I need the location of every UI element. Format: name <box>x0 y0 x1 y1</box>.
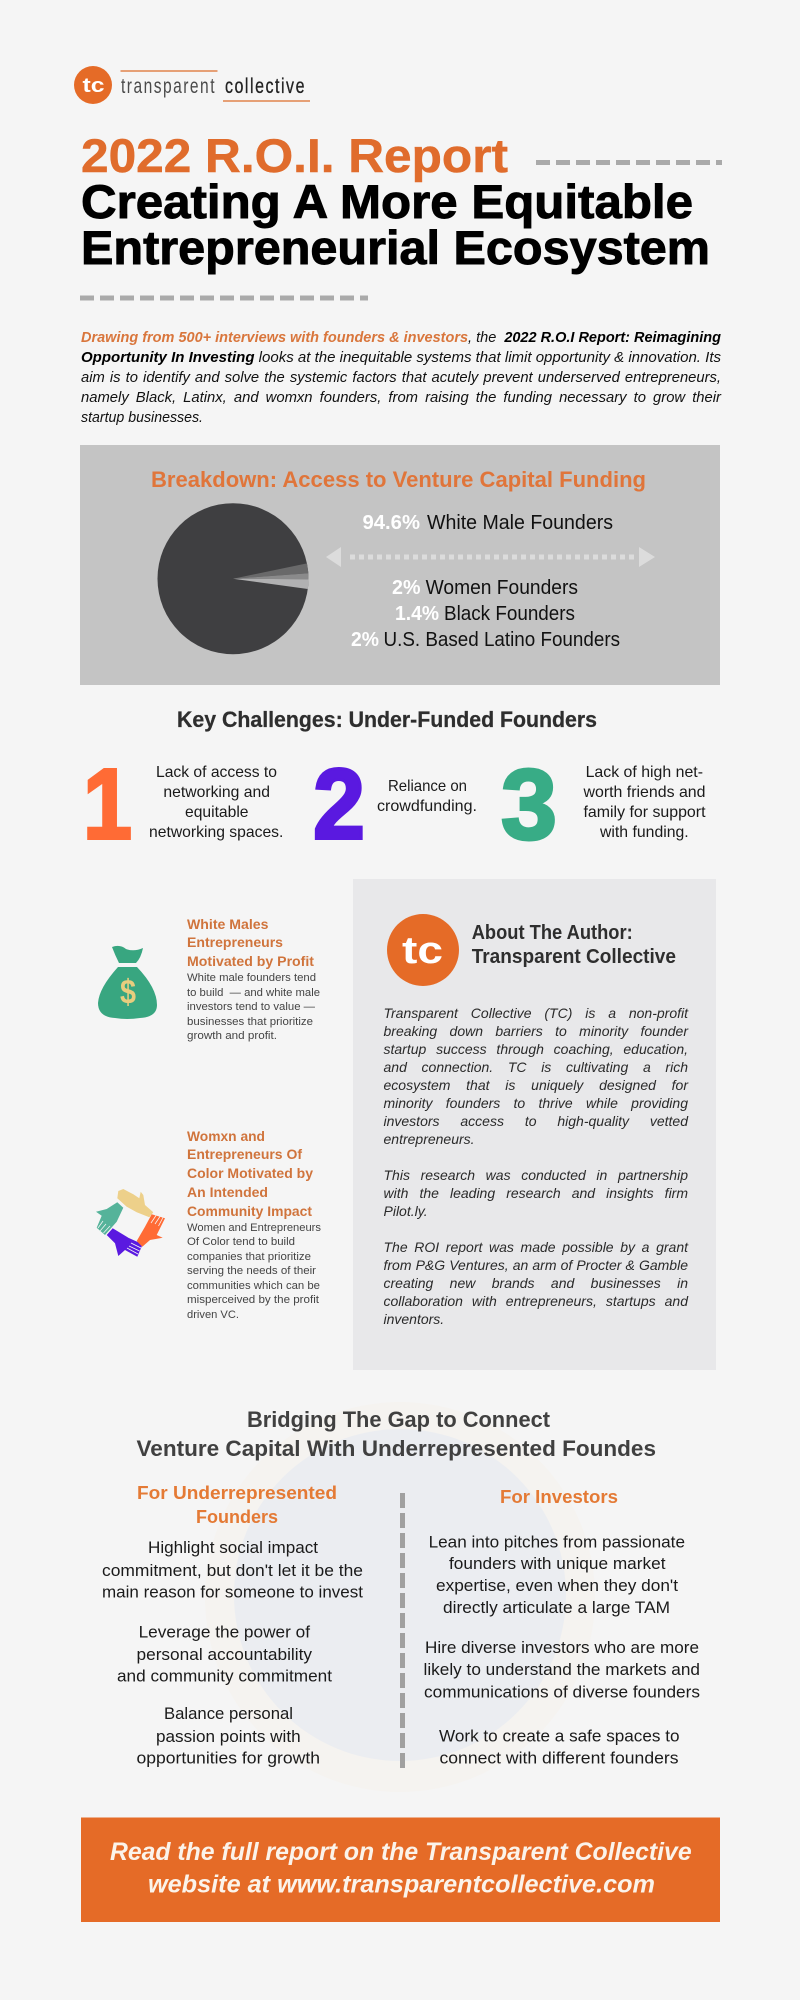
background circle behind bridging section <box>205 1402 595 1792</box>
challenge 3: 3 <box>501 749 557 861</box>
challenge 2: 2 <box>313 748 365 860</box>
text: about the author body: creating new brands and businesses in <box>384 1275 688 1291</box>
list: advice for founders: Leverage the power of <box>139 1622 310 1642</box>
heading: about the author: About The Author: <box>472 922 633 944</box>
text: about the author body: This research was conducted in partnership <box>384 1167 688 1183</box>
logo: transparent collective: collective <box>225 75 306 98</box>
logo: transparent collective <box>74 66 310 104</box>
icon: tc logo circle <box>387 914 459 986</box>
dashed divider between columns <box>400 1493 405 1768</box>
arrow: double-headed dotted <box>326 547 655 567</box>
text: womxn and entrepreneurs of color motivated by impact: Of Color tend to build <box>187 1236 295 1248</box>
list: advice for founders: opportunities for growth <box>136 1748 320 1768</box>
text: about the author body: and connection. TC is cultivating a rich <box>384 1059 688 1075</box>
list: advice for investors: connect with different founders <box>440 1748 678 1768</box>
label: latino founders: 2% <box>351 629 379 651</box>
banner: read the full report: Read the full report on the Transparent Collective <box>110 1838 692 1866</box>
title: Creating A More Equitable <box>81 175 693 228</box>
list: advice for founders: personal accountability <box>136 1645 312 1664</box>
heading: bridging the gap: Bridging The Gap to Connect <box>247 1407 551 1432</box>
banner: read the full report <box>81 1818 720 1922</box>
logo: transparent collective: transparent <box>121 75 216 98</box>
challenge 1: equitable <box>185 804 249 821</box>
intro paragraph: Drawing from 500+ interviews with founders & investors, the 2022 R.O.I Report: Reimagining <box>81 329 721 346</box>
heading: for underrepresented founders: Founders <box>196 1506 278 1527</box>
text: white male entrepreneurs motivated by profit: Motivated by Profit <box>187 954 315 969</box>
challenge 3: with funding. <box>599 824 689 841</box>
label: black founders: Black Founders <box>444 603 575 625</box>
text: womxn and entrepreneurs of color motivated by impact: Women and Entrepreneurs <box>187 1222 322 1234</box>
heading: for investors: For Investors <box>500 1486 618 1507</box>
pie chart <box>158 503 309 654</box>
intro paragraph: namely Black, Latinx, and womxn founders, from raising the funding necessary to grow their <box>81 389 722 406</box>
intro paragraph <box>81 329 722 426</box>
intro paragraph: startup businesses. <box>81 409 203 426</box>
text: about the author body: Transparent Collective (TC) is a non-profit <box>384 1005 688 1021</box>
label: black founders <box>395 603 575 625</box>
panel: about the author background and header <box>353 879 716 1370</box>
challenge 3: worth friends and <box>583 784 706 801</box>
text: womxn and entrepreneurs of color motivated by impact: communities which can be <box>187 1280 320 1292</box>
list: advice for founders: passion points with <box>156 1727 301 1746</box>
text: about the author body: minority founders to thrive while providing <box>384 1095 688 1111</box>
list: advice for investors: expertise, even when they don't <box>436 1576 678 1595</box>
heading: bridging the gap: Venture Capital With Underrepresented Foundes <box>136 1436 656 1461</box>
icon: money bag <box>98 946 157 1019</box>
challenge 1: networking and <box>163 784 270 801</box>
text: womxn and entrepreneurs of color motivated by impact: serving the needs of their <box>187 1265 316 1277</box>
challenge 3: Lack of high net- <box>586 764 703 781</box>
title: Entrepreneurial Ecosystem <box>81 221 710 274</box>
icon: four hands <box>96 1189 165 1257</box>
list: advice for founders: Highlight social impact <box>148 1538 318 1557</box>
icon: tc logo circle: tc <box>402 930 443 972</box>
list: advice for investors: likely to understand the markets and <box>424 1660 700 1679</box>
text: womxn and entrepreneurs of color motivated by impact: Womxn and <box>187 1129 265 1144</box>
challenge 2: crowdfunding. <box>377 798 477 815</box>
text: white male entrepreneurs motivated by profit: White Males <box>187 917 268 932</box>
text: about the author body: The ROI report was made possible by a grant <box>384 1239 688 1255</box>
icon: money bag: $ <box>120 974 136 1012</box>
text: womxn and entrepreneurs of color motivated by impact <box>187 1129 322 1321</box>
text: white male entrepreneurs motivated by profit: to build — and white male <box>187 987 320 999</box>
text: about the author body <box>384 1005 688 1327</box>
text: white male entrepreneurs motivated by profit: Entrepreneurs <box>187 935 283 950</box>
text: about the author body: with the leading research and insights firm <box>384 1185 688 1201</box>
challenge 1: networking spaces. <box>149 824 283 841</box>
dashed rule: below title <box>80 296 368 300</box>
text: about the author body: investors access to high-quality vetted <box>384 1113 688 1129</box>
list: advice for founders: Balance personal <box>164 1704 293 1723</box>
panel: breakdown of venture capital funding <box>80 445 720 685</box>
heading: breakdown: Breakdown: Access to Venture Capital Funding <box>151 467 646 492</box>
heading: bridging the gap <box>136 1407 656 1461</box>
intro paragraph: aim is to identify and solve the systemic factors that acutely prevent underserved entrepreneurs, <box>81 369 721 386</box>
heading: about the author <box>472 922 676 968</box>
list: advice for founders: and community commitment <box>117 1666 332 1686</box>
list: advice for investors: communications of diverse founders <box>424 1682 700 1702</box>
text: about the author body: breaking down barriers to minority founder <box>384 1023 688 1039</box>
list: advice for founders: main reason for someone to invest <box>102 1582 363 1602</box>
text: womxn and entrepreneurs of color motivated by impact: Entrepreneurs Of <box>187 1147 303 1162</box>
list: advice for investors: founders with unique market <box>449 1554 666 1573</box>
text: white male entrepreneurs motivated by profit: investors tend to value — <box>187 1001 315 1013</box>
list: advice for investors: directly articulate a large TAM <box>443 1598 670 1617</box>
text: womxn and entrepreneurs of color motivated by impact: driven VC. <box>187 1309 239 1321</box>
text: womxn and entrepreneurs of color motivated by impact: Color Motivated by <box>187 1166 314 1181</box>
title: 2022 R.O.I. Report <box>81 129 508 182</box>
label: white male founders: 94.6% <box>362 512 420 534</box>
challenge 2 <box>313 748 477 860</box>
text: white male entrepreneurs motivated by profit: White male founders tend <box>187 972 316 984</box>
logo: transparent collective: tc <box>82 75 104 97</box>
banner: read the full report: website at www.transparentcollective.com <box>148 1870 655 1898</box>
label: latino founders: U.S. Based Latino Founders <box>384 629 620 651</box>
heading: for underrepresented founders <box>137 1482 337 1527</box>
list: advice for investors: Work to create a safe spaces to <box>439 1726 680 1746</box>
list: advice for founders: commitment, but don't let it be the <box>102 1561 363 1580</box>
dashed rule: beside title <box>536 160 722 165</box>
label: white male founders: White Male Founders <box>427 512 613 534</box>
label: black founders: 1.4% <box>395 603 439 625</box>
heading: for underrepresented founders: For Underrepresented <box>137 1482 337 1503</box>
heading: key challenges: Key Challenges: Under-Funded Founders <box>177 707 597 732</box>
list: advice for investors: Lean into pitches from passionate <box>429 1532 685 1552</box>
text: about the author body: collaboration with entrepreneurs, startups and <box>384 1293 688 1309</box>
text: about the author body: Pilot.ly. <box>384 1203 428 1219</box>
label: women founders: 2% <box>392 577 421 599</box>
challenge 1: Lack of access to <box>156 764 277 781</box>
challenge 3: family for support <box>584 804 706 821</box>
text: white male entrepreneurs motivated by profit <box>187 917 320 1042</box>
title <box>81 129 710 274</box>
text: about the author body: from P&G Ventures, an arm of Procter & Gamble <box>384 1257 688 1273</box>
text: womxn and entrepreneurs of color motivated by impact: misperceived by the profit <box>187 1294 319 1306</box>
heading: about the author: Transparent Collective <box>472 946 676 968</box>
intro paragraph: Opportunity In Investing looks at the inequitable systems that limit opportunity & innovation. Its <box>81 349 721 366</box>
challenge 3 <box>501 749 706 861</box>
text: white male entrepreneurs motivated by profit: growth and profit. <box>187 1030 277 1042</box>
text: about the author body: startup success through coaching, education, <box>384 1041 688 1057</box>
text: about the author body: inventors. <box>384 1311 444 1327</box>
text: womxn and entrepreneurs of color motivated by impact: An Intended <box>187 1185 268 1200</box>
text: white male entrepreneurs motivated by profit: businesses that prioritize <box>187 1016 313 1028</box>
list: advice for founders <box>102 1538 363 1768</box>
list: advice for investors <box>424 1532 700 1768</box>
challenge 2: Reliance on <box>388 778 467 795</box>
challenge 1: 1 <box>83 748 132 860</box>
list: advice for investors: Hire diverse investors who are more <box>425 1638 699 1657</box>
text: about the author body: ecosystem that is uniquely designed for <box>384 1077 688 1093</box>
label: women founders: Women Founders <box>426 577 578 599</box>
challenge 1 <box>83 748 283 860</box>
text: womxn and entrepreneurs of color motivated by impact: Community Impact <box>187 1204 313 1219</box>
text: womxn and entrepreneurs of color motivated by impact: companies that prioritize <box>187 1251 311 1263</box>
text: about the author body: entrepreneurs. <box>384 1131 475 1147</box>
